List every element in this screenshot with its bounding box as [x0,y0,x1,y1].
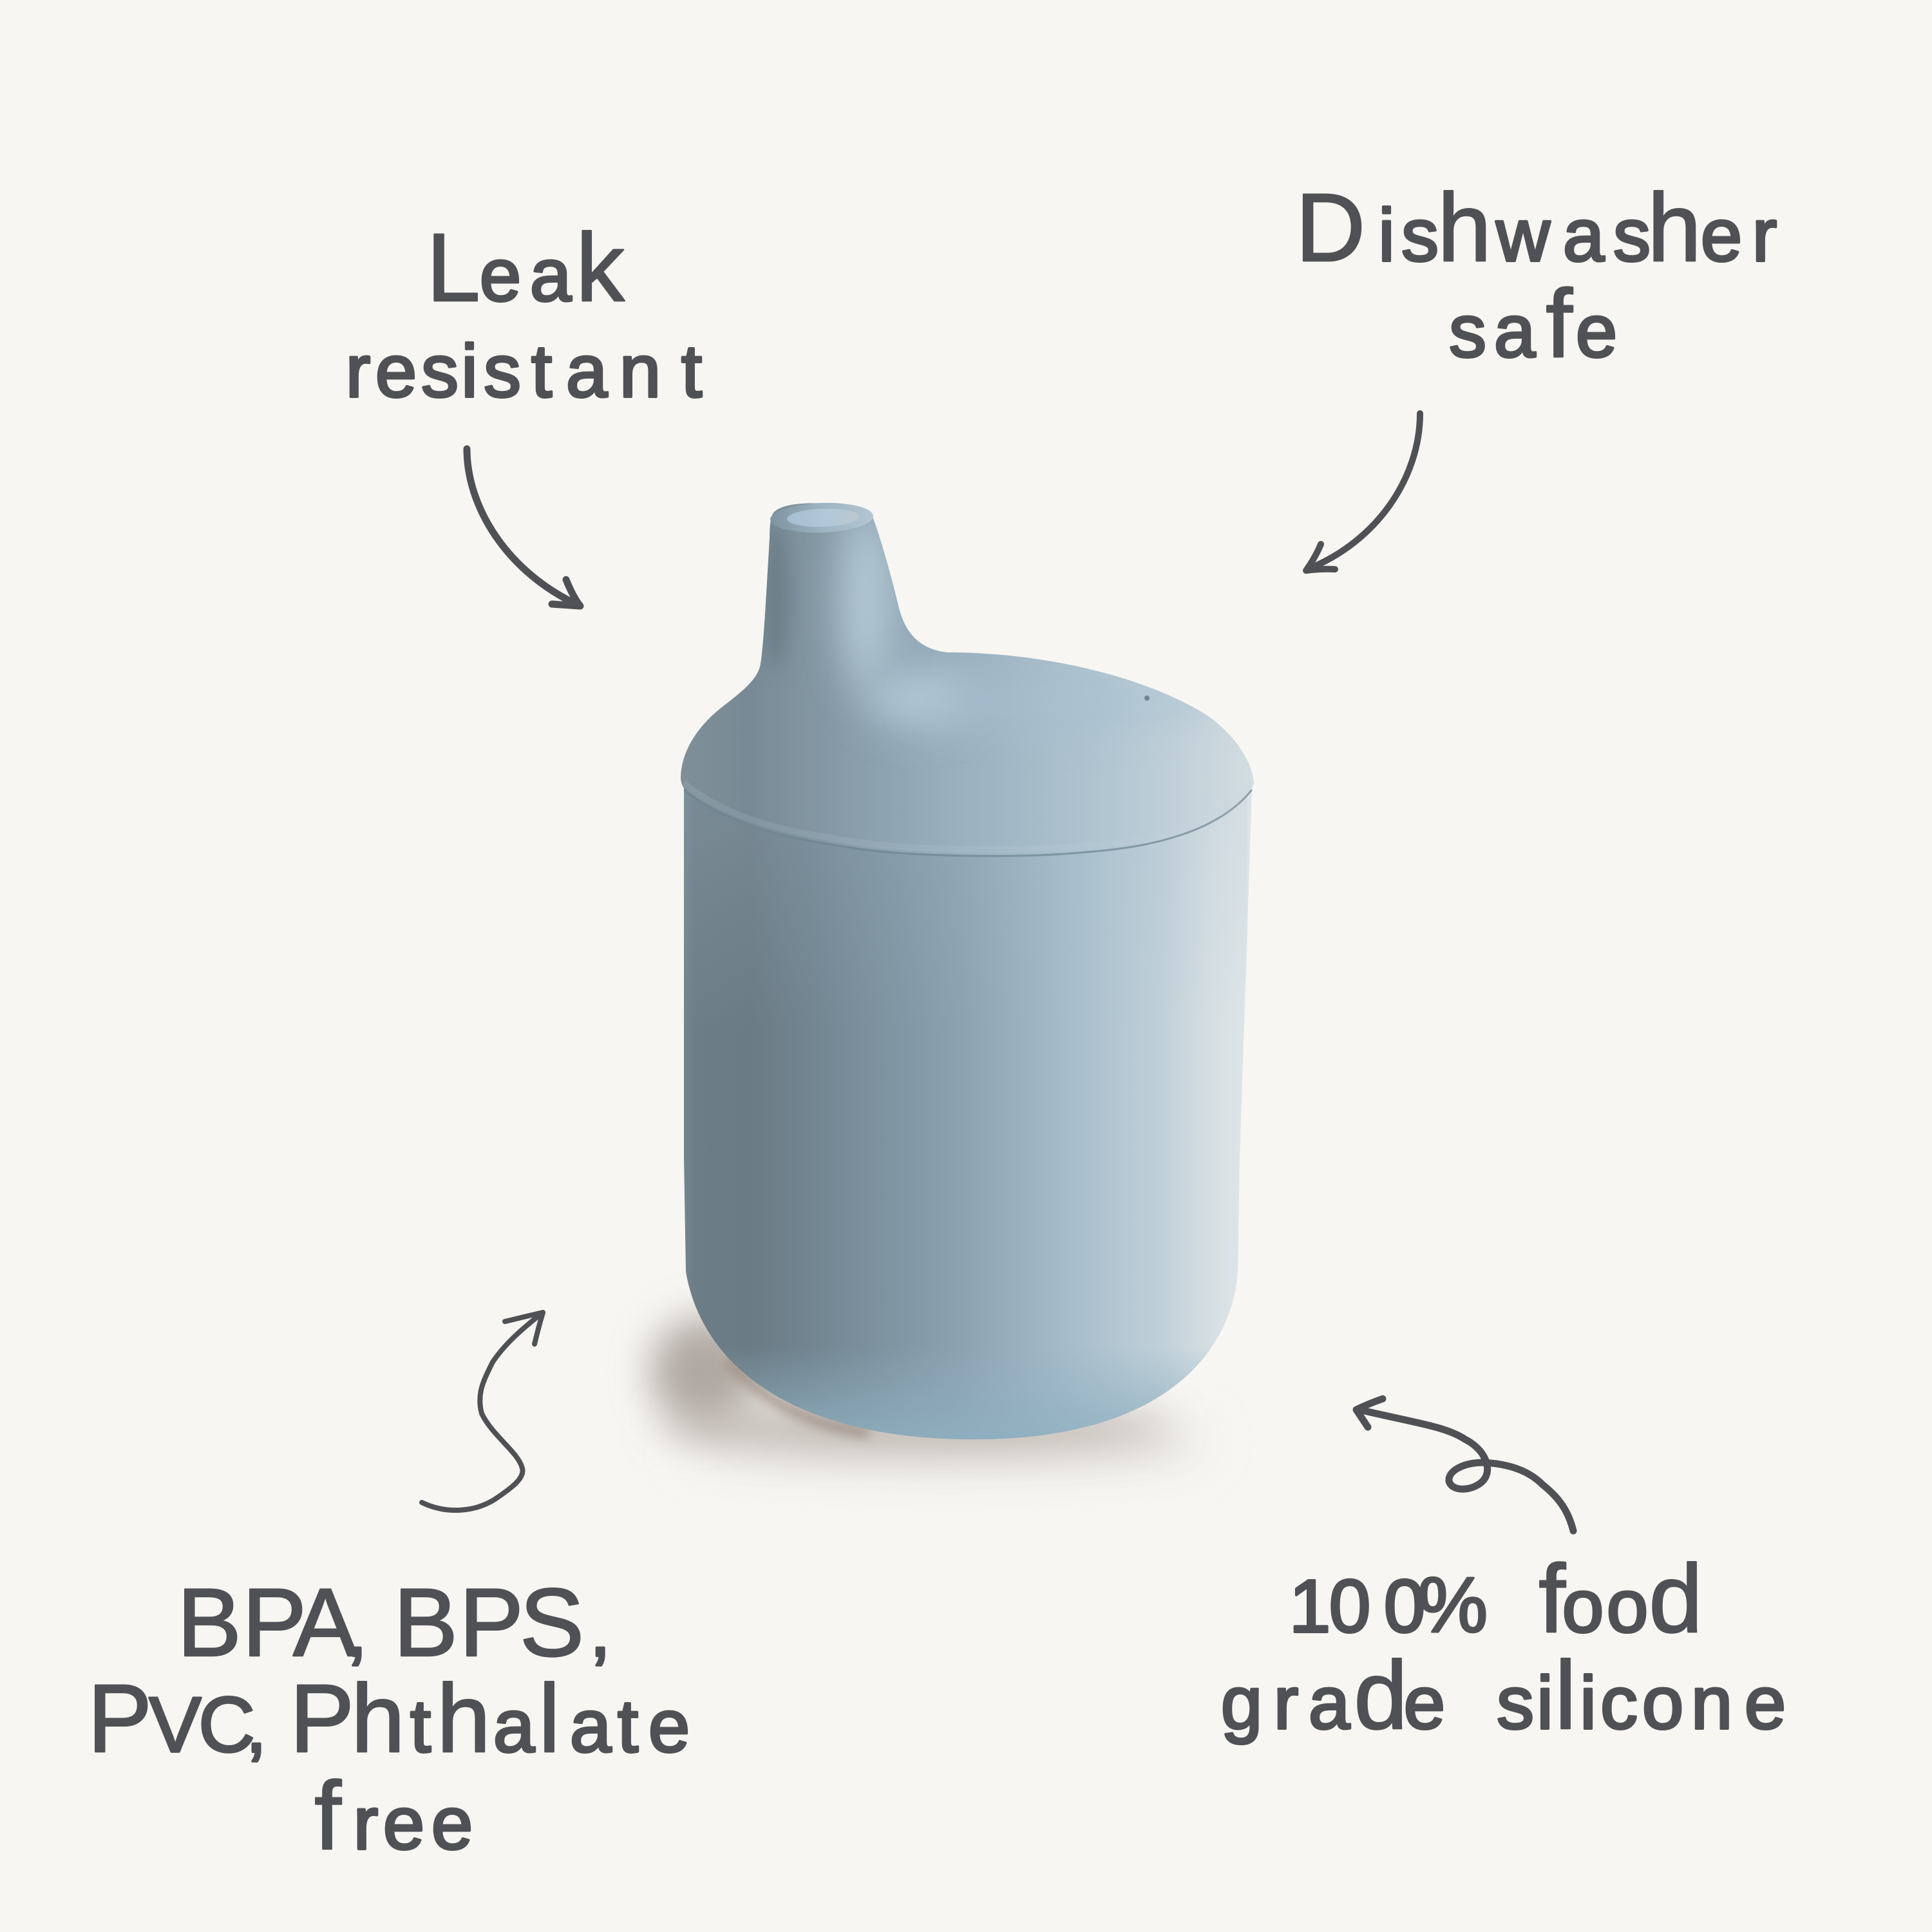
label text: P [88,1664,152,1772]
label text: L [426,213,480,321]
label text: t [410,1684,431,1768]
label text: er [1701,193,1777,277]
callout: BPA, BPS, PVC, Phthalate free [88,1312,690,1870]
label text: d [1354,1641,1408,1749]
label text: , [246,1684,267,1768]
cup lid with spout [681,503,1254,856]
label text: is [1378,193,1439,277]
label text: e [1404,1661,1445,1745]
label text: h [1647,173,1701,281]
arrow: points to lid [1306,413,1420,571]
air vent hole [1144,696,1150,701]
label text: Ph [290,1664,405,1772]
label text: BPS [393,1568,584,1676]
label text: , [346,1588,367,1672]
label text: ate [570,1684,690,1768]
label text: l [538,1664,560,1772]
label text: f [1546,269,1573,377]
label text: si [1497,1661,1553,1745]
callout: Leak resistant [346,213,702,606]
label text: was [1495,193,1651,277]
arrow: points to cup base [422,1312,543,1510]
label text [1296,173,1777,377]
label text [88,1568,690,1870]
callout: Dishwasher safe [1296,173,1777,571]
label text: sa [1449,289,1536,373]
callout: 100% food grade silicone [1221,1399,1786,1749]
label text: a [493,1684,535,1768]
label text: oo [1562,1564,1648,1648]
spout opening [770,501,874,535]
label text: e [1576,289,1617,373]
label text: , [590,1588,611,1672]
label text: D [1296,173,1365,281]
arrow: curly, points to cup base [1356,1399,1573,1531]
product photo: silicone sippy cup [650,501,1254,1462]
label text: f [1539,1544,1566,1653]
label text: gra [1221,1661,1350,1745]
label text: resistant [346,329,702,413]
label text: 100 [1289,1564,1425,1648]
label text: BPA [177,1568,357,1676]
arrow: points to spout [467,449,580,606]
cup body [684,788,1252,1439]
label text: ree [354,1781,473,1865]
label text: h [1437,173,1492,281]
label text: l [1555,1641,1577,1749]
label text: d [1649,1544,1703,1653]
label text: % [1418,1561,1488,1649]
label text: icone [1580,1661,1786,1745]
label text [346,213,702,413]
label text: VC [149,1681,255,1768]
label text: k [576,213,625,321]
label text [1221,1544,1786,1749]
label text: ea [480,233,572,317]
cup shadow [650,1317,1204,1462]
label text: h [437,1664,491,1772]
label text: f [314,1761,341,1870]
